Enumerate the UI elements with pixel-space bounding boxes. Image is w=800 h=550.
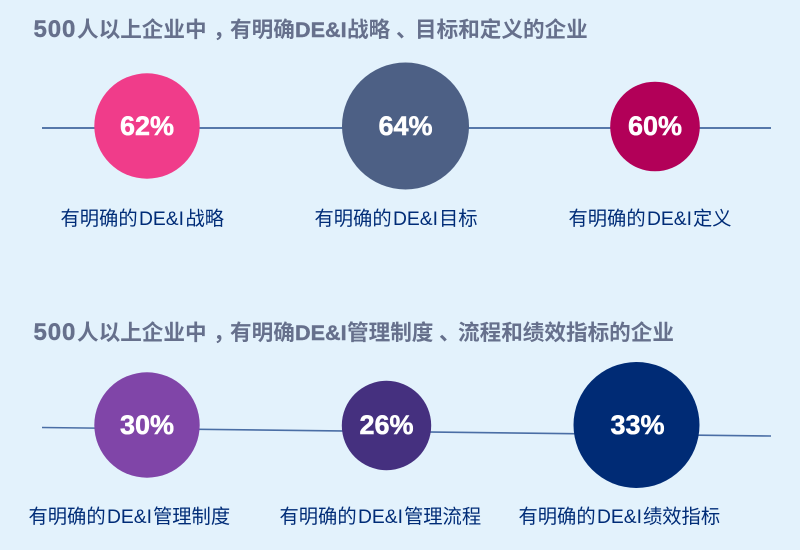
label: performance metrics: DE&I: [597, 507, 642, 528]
heading: systems, processes and metrics: 、: [439, 320, 461, 345]
heading: strategy, goals and definition: 500: [34, 16, 76, 43]
label: definition: DE&I: [647, 209, 692, 230]
heading: systems, processes and metrics: 管理制度: [347, 320, 433, 345]
heading: strategy, goals and definition: ，: [213, 17, 235, 42]
label: goals: DE&I: [393, 209, 438, 230]
heading: strategy, goals and definition: 人以上企业中: [77, 17, 207, 42]
bubble: 33% performance metrics: 33%: [610, 410, 665, 440]
heading: strategy, goals and definition: 、: [396, 17, 418, 42]
heading: strategy, goals and definition: 目标和定义的企业: [415, 17, 588, 42]
label: management systems: 管理制度: [153, 506, 230, 528]
label: goals: 有明确的: [314, 208, 392, 230]
label: definition: 有明确的: [568, 208, 646, 230]
heading: systems, processes and metrics: DE&I: [295, 320, 347, 345]
label: performance metrics: 有明确的: [518, 506, 596, 528]
connecting line top: [42, 127, 771, 129]
label: strategy: DE&I: [139, 209, 184, 230]
connecting line bottom: [42, 428, 771, 436]
heading: systems, processes and metrics: 流程和绩效指标的企业: [458, 320, 674, 345]
heading: strategy, goals and definition: DE&I: [295, 17, 347, 42]
bubble: 62% strategy: [94, 73, 200, 179]
label: management systems: DE&I: [107, 507, 152, 528]
bubble: 60% definition: [610, 82, 700, 171]
panel: bottom row chart: [42, 362, 771, 488]
heading: systems, processes and metrics: 500: [34, 319, 76, 346]
bubble: 33% performance metrics: [574, 362, 700, 488]
label: strategy: 有明确的: [60, 208, 138, 230]
bubble: 30% management systems: [94, 372, 200, 478]
label: management systems: 有明确的: [28, 506, 106, 528]
label: strategy: 战略: [186, 208, 224, 230]
bubble: 64% goals: 64%: [378, 111, 433, 141]
heading: strategy, goals and definition: 有明确: [230, 17, 295, 42]
label: management processes: 管理流程: [404, 506, 481, 528]
label: management processes: 有明确的: [280, 506, 357, 528]
bubble: 30% management systems: 30%: [120, 410, 174, 440]
bubble: 64% goals: [342, 62, 469, 190]
heading: systems, processes and metrics: 有明确: [230, 320, 295, 345]
label: performance metrics: 绩效指标: [643, 506, 720, 528]
bubble: 60% definition: 60%: [628, 111, 682, 141]
heading: systems, processes and metrics: 人以上企业中: [77, 320, 207, 345]
panel: top row chart: [42, 62, 771, 190]
label: definition: 定义: [693, 208, 732, 230]
bubble: 26% management processes: [342, 381, 431, 470]
heading: systems, processes and metrics: ，: [213, 320, 235, 345]
bubble: 62% strategy: 62%: [120, 111, 174, 141]
label: management processes: DE&I: [358, 507, 403, 528]
label: goals: 目标: [439, 208, 478, 230]
heading: strategy, goals and definition: 战略: [347, 17, 391, 42]
bubble: 26% management processes: 26%: [359, 410, 414, 440]
